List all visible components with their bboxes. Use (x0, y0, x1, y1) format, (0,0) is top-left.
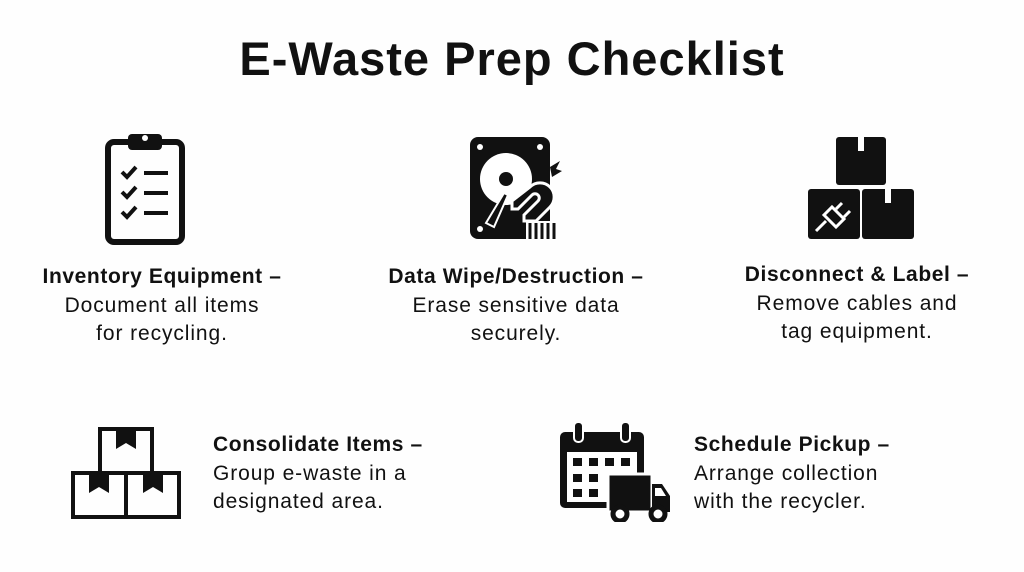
text: data wipe (388, 265, 644, 345)
icon: stacked boxes (71, 427, 181, 519)
text: data wipe: Data Wipe/Destruction – (388, 265, 644, 288)
text: disconnect: Disconnect & Label – (745, 263, 969, 286)
text: disconnect: Remove cables and (757, 292, 957, 314)
text: inventory (43, 265, 281, 345)
text: schedule (694, 433, 890, 513)
icon: hard drive with magnet (470, 137, 562, 239)
text: consolidate: designated area. (213, 490, 384, 513)
text: data wipe: Erase sensitive data (412, 294, 620, 316)
text: schedule: with the recycler. (694, 490, 867, 513)
text: disconnect (745, 263, 969, 343)
text: schedule: Schedule Pickup – (694, 433, 890, 456)
text: consolidate: Group e-waste in a (213, 462, 407, 484)
text: inventory: Document all items (65, 294, 259, 316)
text: consolidate (213, 433, 423, 513)
text: consolidate: Consolidate Items – (213, 433, 423, 456)
icon: boxes with plug (808, 137, 914, 239)
text: inventory: Inventory Equipment – (43, 265, 281, 288)
text: schedule: Arrange collection (694, 462, 878, 484)
text: disconnect: tag equipment. (781, 320, 933, 343)
text: inventory: for recycling. (96, 322, 228, 345)
title: E-Waste Prep Checklist (239, 32, 785, 85)
icon: calendar with truck (560, 423, 670, 522)
icon: clipboard (105, 134, 185, 245)
text: data wipe: securely. (471, 322, 561, 345)
